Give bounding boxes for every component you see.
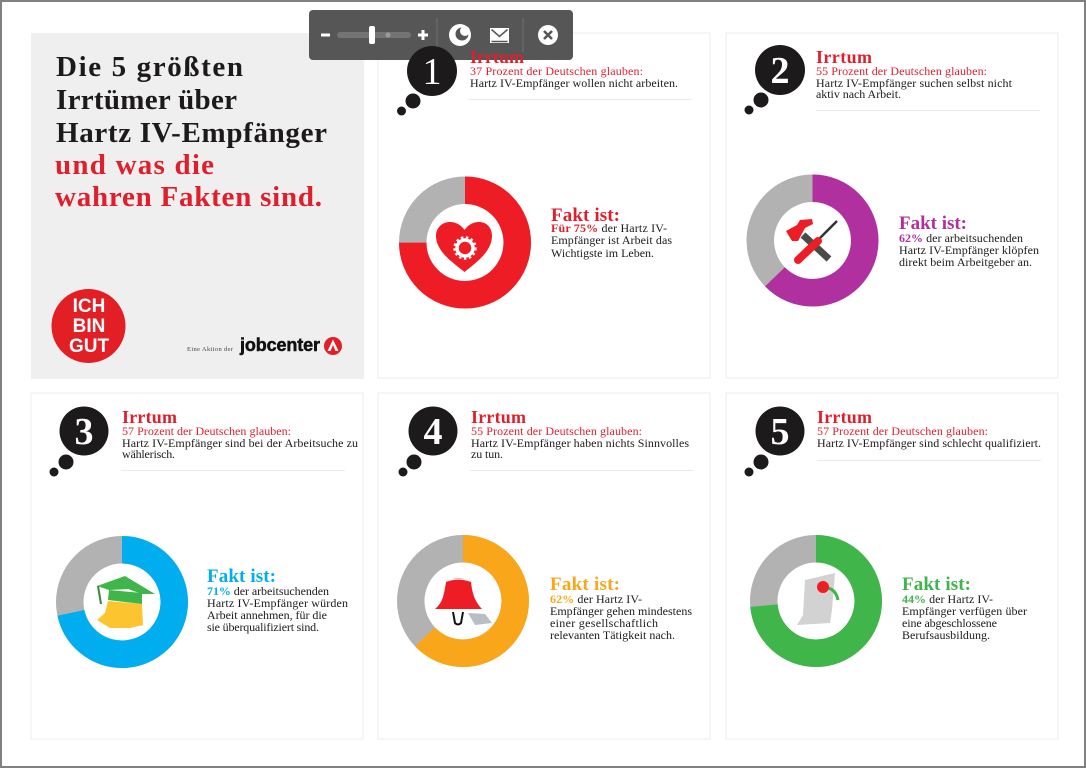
badge: ich bin gut: GUT [69,336,109,357]
text: fact 5: Empfänger verfügen über [902,604,1027,618]
text: myth 4: Hartz IV-Empfänger haben nichts Sinnvolles [471,436,689,450]
text: fact 1: Wichtigste im Leben. [551,246,654,260]
logo: jobcenter [187,335,342,355]
text: fact 5: eine abgeschlossene [902,616,997,630]
text: fact 2: direkt beim Arbeitgeber an. [899,255,1032,269]
badge: ich bin gut [52,289,126,363]
text: fact 1: Empfänger ist Arbeit das [551,233,672,247]
heading: und was die [55,149,214,181]
text: myth 3 [122,407,358,461]
text: fact 4: Empfänger gehen mindestens [550,604,692,618]
donut chart: 71 percent [70,550,174,654]
text: myth 3: Irrtum [122,407,177,427]
text: myth 2 [816,47,1013,101]
text: fact 4: 62% der Hartz IV- [550,592,642,606]
text: myth 2: aktiv nach Arbeit. [816,87,901,101]
text: myth 3: Hartz IV-Empfänger sind bei der Arbeitsuche zu [122,436,358,450]
text: myth 2: Hartz IV-Empfänger suchen selbst nicht [816,76,1013,90]
heading: Hartz IV-Empfänger [56,117,327,149]
panel: myth 1 card [378,33,710,378]
text: myth 2: Irrtum [816,47,872,67]
text: myth 1: 37 Prozent der Deutschen glauben: [470,64,643,78]
text: fact 2: Hartz IV-Empfänger klöpfen [899,243,1039,257]
panel: myth 3 [31,393,363,739]
donut chart: 62 percent [411,549,515,653]
text: myth 5: Irrtum [817,407,872,427]
text: myth 1 [470,47,678,90]
text: fact 3: sie überqualifiziert sind. [207,620,319,634]
text: fact 3: Hartz IV-Empfänger würden [207,596,348,610]
panel: myth 2 [726,33,1058,378]
text: fact 1: Fakt ist: [551,205,620,226]
icon: thought bubble 5 [744,406,804,476]
text: fact 4: relevanten Tätigkeit nach. [550,628,675,642]
text: myth 5 [817,407,1041,450]
text: fact 5: Berufsausbildung. [902,628,990,642]
text: myth 2: 55 Prozent der Deutschen glauben: [816,64,987,78]
text: myth 1: Hartz IV-Empfänger wollen nicht arbeiten. [470,76,678,90]
text: fact 4 [550,574,692,642]
text: fact 2 [899,213,1039,269]
logo: jobcenter: jobcenter [239,335,320,355]
heading: wahren Fakten sind. [55,181,322,213]
text: myth 4: zu tun. [471,447,503,461]
icon: thought bubble 3: 3 [74,411,94,453]
text: myth 4: 55 Prozent der Deutschen glauben: [471,424,642,438]
panel: myth 1 content [397,46,692,295]
text: fact 1 [551,205,672,260]
text: myth 4: Irrtum [471,407,526,427]
text: fact 4: Fakt ist: [550,574,620,595]
icon: thought bubble 5: 5 [770,411,790,453]
text: myth 5: Hartz IV-Empfänger sind schlecht qualifiziert. [817,436,1041,450]
panel: title [31,33,364,379]
text: myth 5: 57 Prozent der Deutschen glauben: [817,424,988,438]
icon: thought bubble 4 [398,406,458,476]
panel: myth 5 [726,393,1058,739]
text: fact 5 [902,574,1027,642]
text: myth 3: wählerisch. [122,447,175,461]
text: fact 3: 71% der arbeitsuchenden [207,584,329,598]
badge: ich bin gut: ICH [73,296,105,317]
heading: Die 5 größten [56,51,243,83]
text: fact 1: Für 75% der Hartz IV- [551,221,667,235]
text: fact 5: 44% der Hartz IV- [902,592,993,606]
text: fact 3: Arbeit annehmen, für die [207,608,327,622]
icon: fire helmet [435,578,492,625]
text: fact 5: Fakt ist: [902,574,971,595]
badge: ich bin gut: BIN [73,316,105,337]
heading: Irrtümer über [56,84,237,116]
icon: certificate scroll [797,573,838,625]
icon: graduation cap [97,576,155,628]
icon: hammer and screwdriver [786,219,837,260]
donut chart: 44 percent [764,549,868,653]
donut chart: 75 percent [413,190,517,295]
icon: thought bubble 2: 2 [770,50,790,92]
heading [55,51,327,213]
text: myth 3: 57 Prozent der Deutschen glauben: [122,424,291,438]
text: myth 1: Irrtum [470,47,524,67]
icon: thought bubble 1 [397,46,457,116]
donut chart: 62 percent [760,188,865,293]
toolbar: viewer controls [309,10,573,60]
icon: heart with gear [436,222,492,272]
text: fact 4: einer gesellschaftlich [550,616,658,630]
text: fact 2: Fakt ist: [899,213,967,234]
text: fact 3: Fakt ist: [207,566,276,587]
panel: myth 4 [378,393,710,739]
icon: thought bubble 2 [744,45,805,114]
icon: thought bubble 3 [50,406,108,476]
icon: thought bubble 1: 1 [422,51,442,93]
icon: thought bubble 4: 4 [424,411,442,453]
logo: jobcenter: Eine Aktion der [187,346,234,353]
text: myth 4 [471,407,689,461]
text: fact 2: 62% der arbeitsuchenden [899,231,1023,245]
text: fact 3 [207,566,348,634]
